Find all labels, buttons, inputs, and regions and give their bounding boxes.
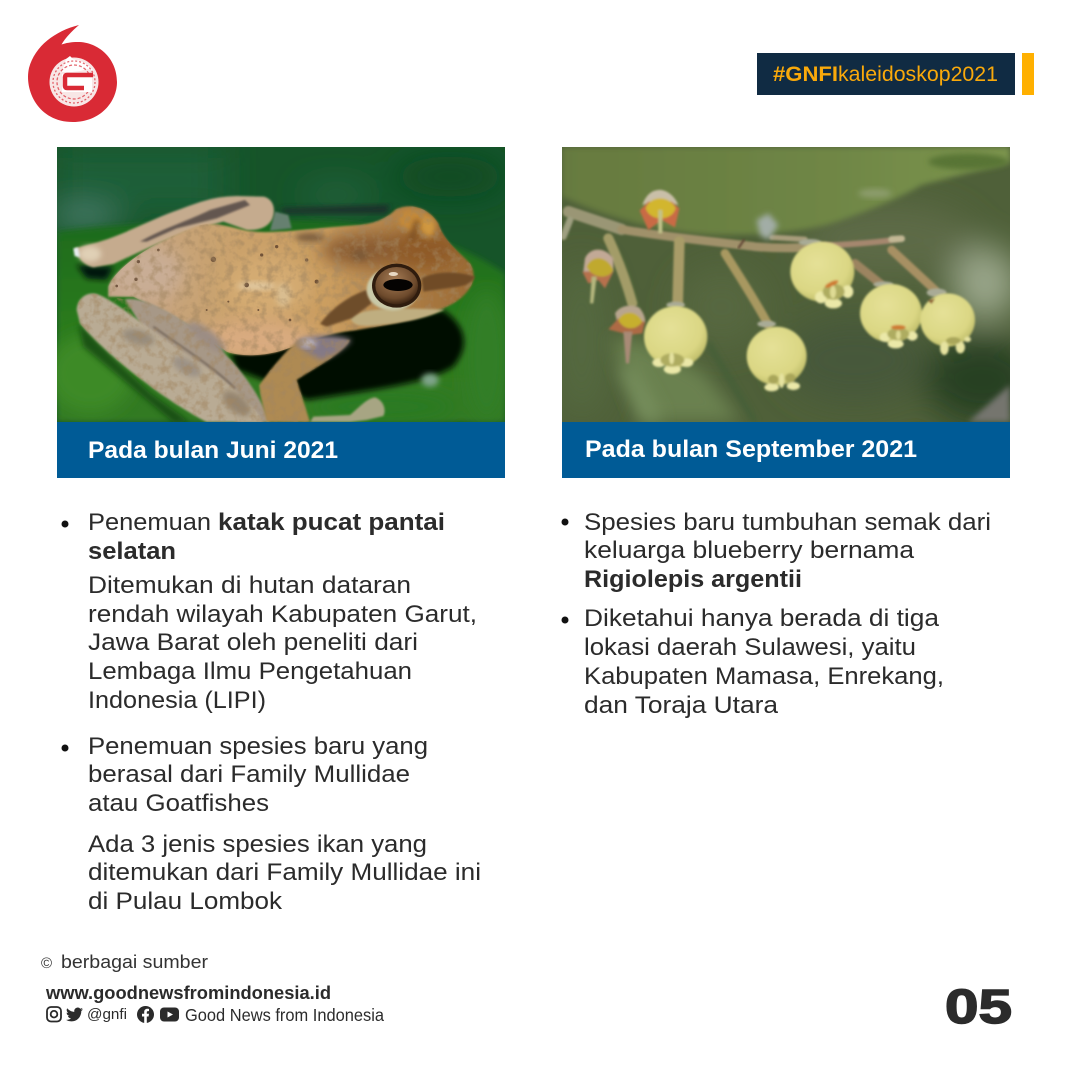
bullet [62,744,68,752]
hashtag text: #GNFI [773,63,838,86]
bullet 1 description: Indonesia (LIPI) [88,687,266,714]
bullet [562,616,568,624]
flower 5 [920,293,975,355]
frog caption bar: Pada bulan Juni 2021 [88,437,338,464]
bullet 2 text: Kabupaten Mamasa, Enrekang, [584,663,944,690]
bullet 1 heading: katak pucat pantai [218,509,445,536]
banner background [757,53,1015,95]
main stem [563,212,935,325]
hind toes [270,212,292,231]
logo: white medallion [50,58,98,106]
pedicels [678,242,679,303]
bullet 2 heading: atau Goatfishes [88,790,269,817]
near hind leg [77,294,263,422]
logo [28,25,117,122]
flower 1 [644,306,707,374]
icon: twitter [66,1008,83,1022]
flowers [644,242,975,391]
lower left leaf [612,340,742,422]
footer links [45,982,384,1025]
bullet 2 description: ditemukan dari Family Mullidae ini [88,859,481,886]
jaw and eye stripe [350,309,445,326]
bullet 1 heading: Penemuan [88,509,211,536]
bullet 1 description [88,572,477,714]
page number: 05 [945,981,1012,1034]
shadow [230,310,464,400]
hashtag banner [757,53,1015,95]
body [108,206,474,355]
buds [582,190,947,363]
flower 2 [747,327,807,391]
plant photo [562,147,1010,422]
bullet 2 text [584,605,944,719]
panel: frog [47,147,510,478]
page name: Good News from Indonesia [185,1005,384,1025]
source credit: berbagai sumber [61,952,208,972]
bullet 1 text [584,509,991,593]
hashtag banner: kaleidoskop2021 [838,63,998,86]
text block: right column [562,509,991,719]
icon: youtube [160,1008,179,1022]
panel: plant [555,147,1038,478]
logo: red G [62,74,93,92]
eye [367,264,421,311]
bullet 2 description: di Pulau Lombok [88,888,283,915]
bullet 1 description: Ditemukan di hutan dataran [88,572,411,599]
bullet 1 heading: selatan [88,538,176,565]
frog photo [57,147,505,422]
bullet 2 heading: Penemuan spesies baru yang [88,733,428,760]
plant caption bar [562,422,1010,478]
bullet 1 text: Spesies baru tumbuhan semak dari [584,509,991,536]
bullet 2 heading: berasal dari Family Mullidae [88,761,410,788]
handle: @gnfi [87,1006,127,1023]
flower 4 [860,284,922,348]
bullet 1 text: keluarga blueberry bernama [584,537,915,564]
bullet [62,520,68,528]
logo: eagle head [62,56,94,72]
far hind leg [75,196,274,267]
bullet 2 heading [88,733,428,817]
top leaf [562,147,1010,235]
mottled skin [70,203,480,423]
bullet 2 text: dan Toraja Utara [584,692,779,719]
front leg [259,338,350,422]
yellow accent bar [1022,53,1034,95]
flower 3 [790,242,854,308]
bullet 2 text: lokasi daerah Sulawesi, yaitu [584,634,916,661]
bullet 2 text: Diketahui hanya berada di tiga [584,605,940,632]
icon: facebook [137,1006,154,1023]
icon: instagram [47,1007,61,1022]
bullet 2 description: Ada 3 jenis spesies ikan yang [88,831,427,858]
text block: left column [62,509,481,915]
plant caption bar: Pada bulan September 2021 [585,436,917,463]
bullet 1 description: rendah wilayah Kabupaten Garut, [88,601,477,628]
frog caption bar [57,422,505,478]
logo: ornament pattern [53,61,95,103]
bullet 1 description: Lembaga Ilmu Pengetahuan [88,658,412,685]
bullet 1 description: Jawa Barat oleh peneliti dari [88,629,418,656]
far thigh [125,299,270,422]
website: www.goodnewsfromindonesia.id [45,982,331,1003]
logo: red swirl [28,25,117,122]
bullet 1 text: Rigiolepis argentii [584,566,802,593]
bullet [562,518,568,526]
bullet 2 description [88,831,481,915]
bottom right branch [968,385,1010,422]
bullet 1 heading [88,509,445,565]
source credit: © [41,955,52,972]
